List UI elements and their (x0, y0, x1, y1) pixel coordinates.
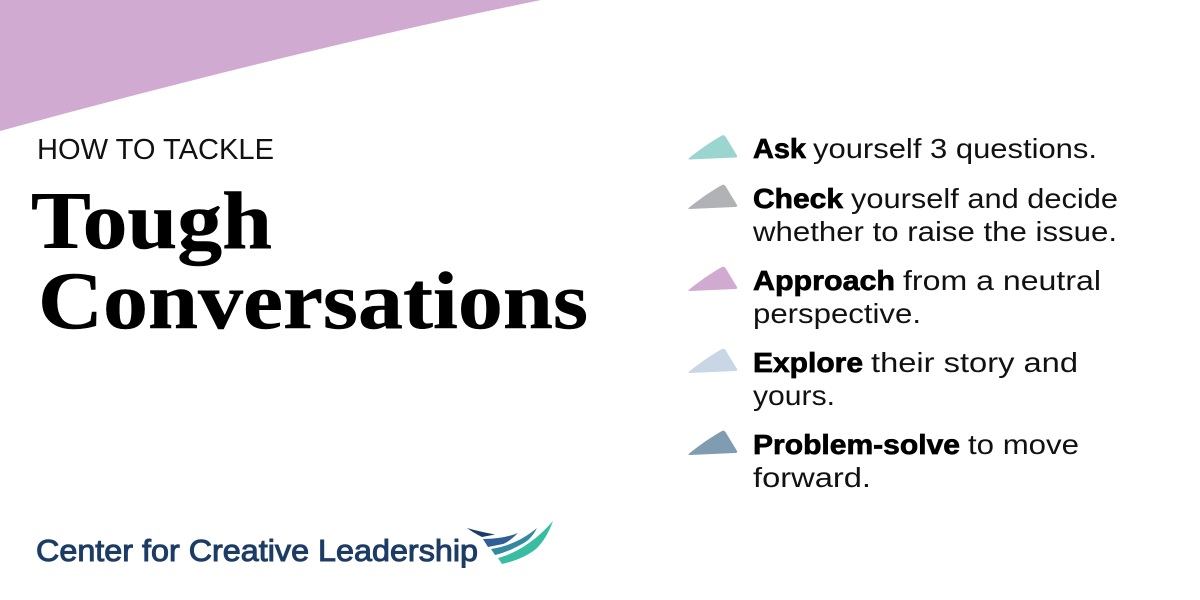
step 2 text: whether to raise the issue. (752, 216, 1117, 247)
step 1: ask (688, 133, 1097, 164)
decorative corner shape (0, 0, 541, 131)
step 2 text: yourself and decide (851, 183, 1118, 214)
step 4 text (753, 347, 1078, 411)
step 5 text: forward. (753, 462, 871, 493)
icon: slate blue triangle (688, 431, 737, 455)
logo mark (467, 521, 553, 564)
step 1 text: yourself 3 questions. (813, 133, 1097, 164)
icon: grey triangle (688, 185, 737, 209)
logo wordmark: Center for Creative Leadership (36, 533, 478, 568)
step 2: check (688, 183, 1118, 247)
step 2 text (752, 183, 1118, 247)
step 4: explore (688, 347, 1078, 411)
step 5 text: to move (968, 429, 1079, 460)
step 4 text: Explore (753, 347, 863, 378)
step 5 text (753, 429, 1079, 493)
step 1 text: Ask (753, 133, 807, 164)
step 3 text: Approach (753, 265, 895, 296)
step 5: problem-solve (688, 429, 1079, 493)
step 3 text: from a neutral (903, 265, 1101, 296)
step 3 text (753, 265, 1101, 329)
icon: pale blue triangle (688, 349, 737, 373)
title (31, 175, 588, 346)
logo: Center for Creative Leadership (36, 521, 553, 568)
step 4 text: yours. (753, 380, 835, 411)
icon: teal triangle (688, 135, 737, 160)
step 2 text: Check (753, 183, 844, 214)
eyebrow heading: HOW TO TACKLE (37, 134, 274, 166)
step 3: approach (688, 265, 1101, 329)
step 3 text: perspective. (753, 298, 921, 329)
step 4 text: their story and (871, 347, 1078, 378)
step 5 text: Problem-solve (753, 429, 960, 460)
title: Conversations (38, 255, 588, 346)
title: Tough (31, 175, 272, 266)
icon: purple triangle (688, 267, 737, 291)
